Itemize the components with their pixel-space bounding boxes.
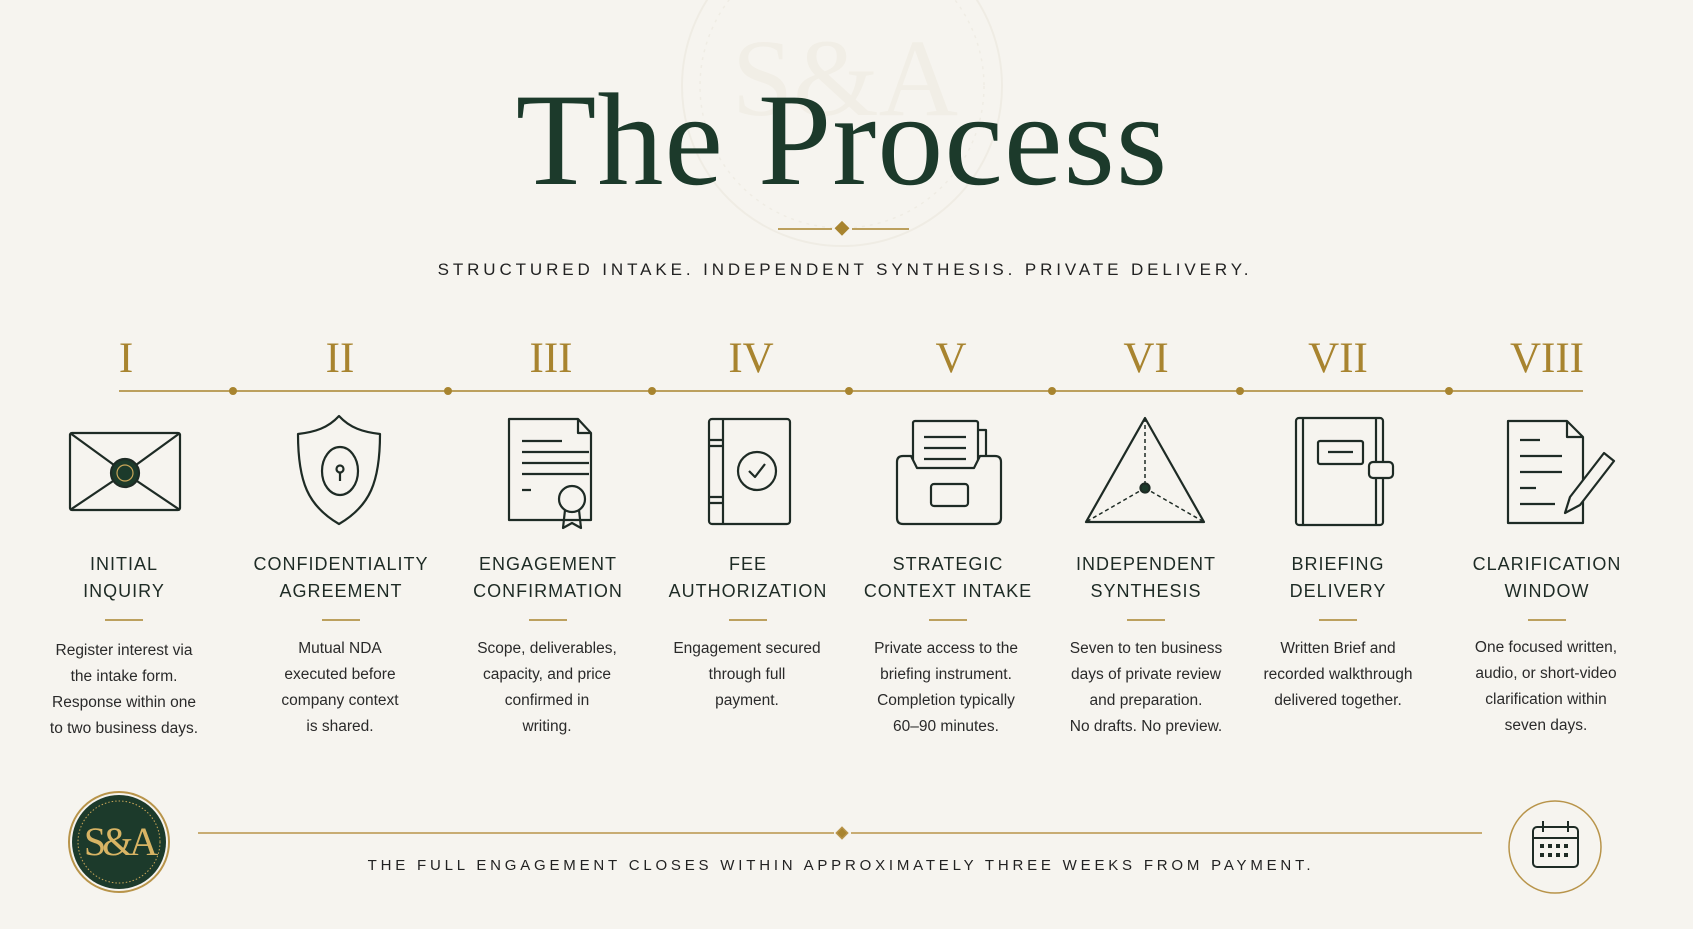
roman numerals: IV xyxy=(728,335,774,382)
descriptions: recorded walkthrough xyxy=(1263,666,1413,683)
descriptions: Engagement secured xyxy=(673,640,821,657)
icon: notebook xyxy=(1296,418,1393,525)
step headings: WINDOW xyxy=(1505,581,1589,601)
descriptions: Mutual NDA xyxy=(298,640,382,657)
bottom divider xyxy=(198,827,1482,839)
watermark monogram xyxy=(682,0,1002,246)
watermark monogram: S&A xyxy=(732,17,958,139)
subtitle: STRUCTURED INTAKE. INDEPENDENT SYNTHESIS. PRIVATE DELIVERY. xyxy=(438,260,1252,279)
step headings: STRATEGIC xyxy=(893,554,1003,574)
descriptions: One focused written, xyxy=(1475,639,1617,656)
descriptions: clarification within xyxy=(1485,691,1607,708)
descriptions: company context xyxy=(281,692,399,709)
descriptions: briefing instrument. xyxy=(880,666,1012,683)
step headings: ENGAGEMENT xyxy=(479,554,617,574)
descriptions: days of private review xyxy=(1071,666,1222,683)
descriptions: and preparation. xyxy=(1090,692,1202,709)
icon: certificate document xyxy=(509,419,591,528)
step headings: INQUIRY xyxy=(83,581,165,601)
icon: book with check xyxy=(709,419,790,524)
seal logo xyxy=(69,792,169,892)
descriptions: Seven to ten business xyxy=(1070,640,1223,657)
step headings: SYNTHESIS xyxy=(1090,581,1202,601)
step headings: AGREEMENT xyxy=(279,581,403,601)
roman numerals: VIII xyxy=(1510,335,1584,382)
icon: document with pen xyxy=(1508,421,1614,523)
step headings: DELIVERY xyxy=(1290,581,1386,601)
descriptions: Private access to the xyxy=(874,640,1018,657)
step headings: AUTHORIZATION xyxy=(669,581,827,601)
descriptions: seven days. xyxy=(1505,717,1587,734)
descriptions: to two business days. xyxy=(50,720,198,737)
short dividers xyxy=(105,619,1566,621)
step headings: CONFIRMATION xyxy=(473,581,623,601)
descriptions: confirmed in xyxy=(505,692,589,709)
icon: calendar xyxy=(1509,801,1601,893)
seal logo: S&A xyxy=(84,819,158,864)
timeline xyxy=(119,387,1583,395)
descriptions: payment. xyxy=(715,692,779,709)
descriptions: Register interest via xyxy=(56,642,193,659)
roman numerals xyxy=(119,335,1584,382)
title: The Process xyxy=(516,66,1168,213)
descriptions: audio, or short-video xyxy=(1475,665,1617,682)
descriptions: the intake form. xyxy=(71,668,177,685)
step headings: CLARIFICATION xyxy=(1473,554,1621,574)
icon: envelope xyxy=(70,433,180,510)
descriptions: Written Brief and xyxy=(1280,640,1396,657)
step headings: CONTEXT INTAKE xyxy=(864,581,1032,601)
descriptions: writing. xyxy=(521,718,572,735)
descriptions: executed before xyxy=(284,666,396,683)
icon: triangle xyxy=(1086,418,1204,522)
step headings: INDEPENDENT xyxy=(1076,554,1216,574)
step headings: BRIEFING xyxy=(1291,554,1385,574)
descriptions: capacity, and price xyxy=(483,666,611,683)
descriptions: 60–90 minutes. xyxy=(893,718,999,735)
roman numerals: V xyxy=(935,335,967,382)
descriptions: is shared. xyxy=(306,718,374,735)
icon: folder with document xyxy=(897,421,1001,524)
roman numerals: VI xyxy=(1123,335,1169,382)
roman numerals: III xyxy=(530,335,572,382)
step headings xyxy=(83,554,1621,601)
roman numerals: I xyxy=(119,335,133,382)
step headings: INITIAL xyxy=(90,554,158,574)
descriptions: Scope, deliverables, xyxy=(477,640,617,657)
title divider xyxy=(778,222,909,235)
descriptions: No drafts. No preview. xyxy=(1070,718,1222,735)
roman numerals: II xyxy=(326,335,354,382)
descriptions xyxy=(50,639,1617,737)
descriptions: Completion typically xyxy=(877,692,1015,709)
descriptions: delivered together. xyxy=(1274,692,1402,709)
step headings: CONFIDENTIALITY xyxy=(253,554,429,574)
icons xyxy=(70,416,1614,528)
descriptions: through full xyxy=(709,666,785,683)
step headings: FEE xyxy=(729,554,767,574)
footer text: THE FULL ENGAGEMENT CLOSES WITHIN APPROXIMATELY THREE WEEKS FROM PAYMENT. xyxy=(368,857,1314,874)
icon: shield xyxy=(298,416,380,524)
roman numerals: VII xyxy=(1308,335,1368,382)
descriptions: Response within one xyxy=(52,694,196,711)
